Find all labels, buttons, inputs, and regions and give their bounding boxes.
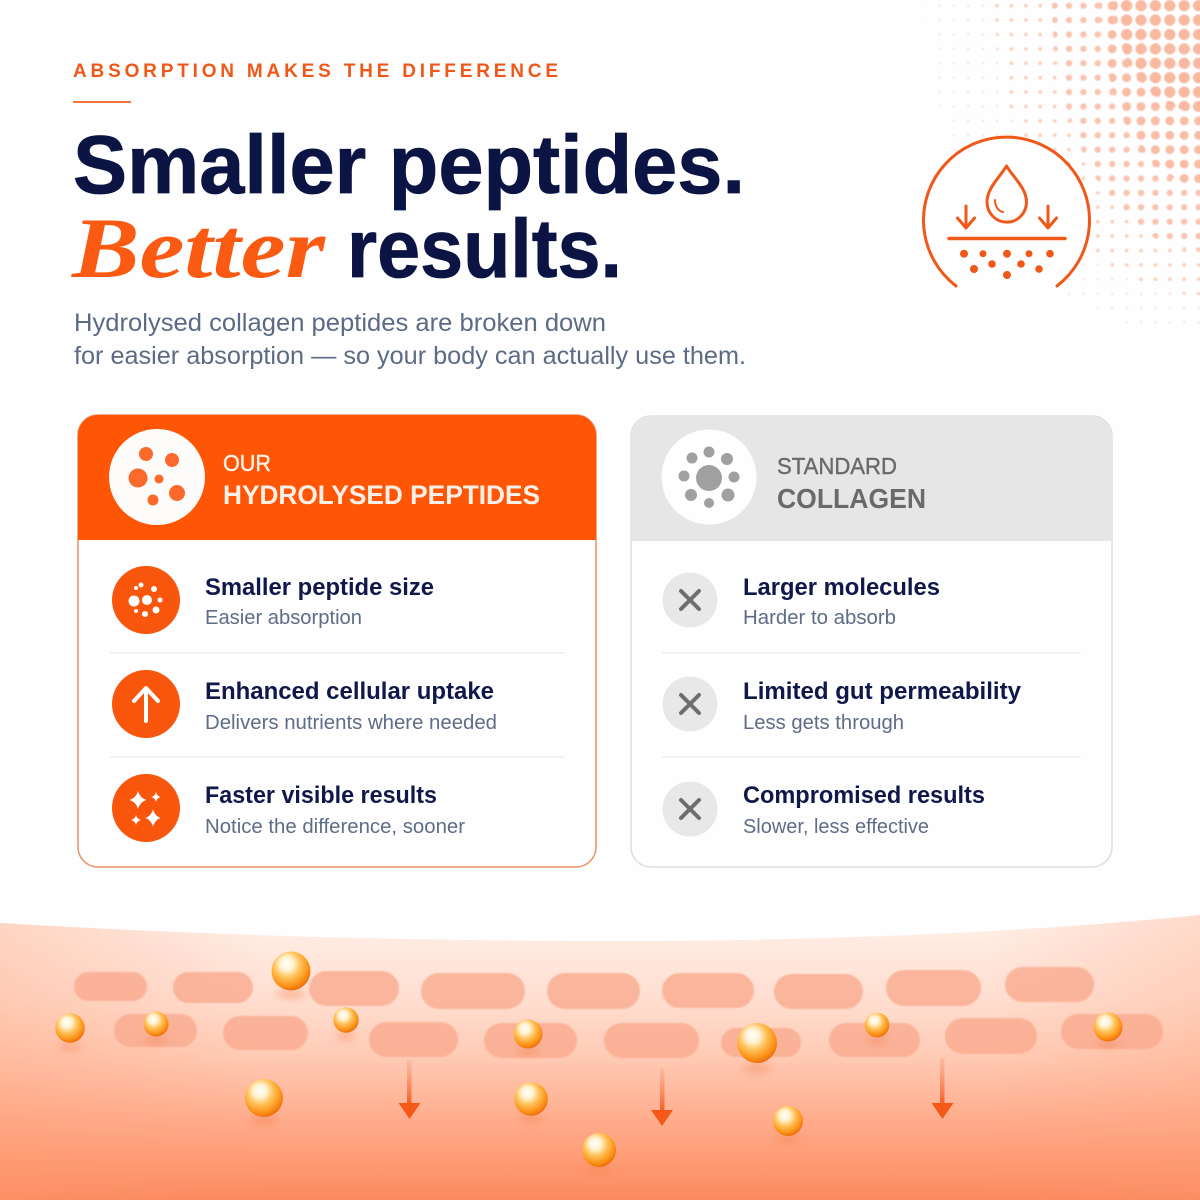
eyebrow heading: ABSORPTION MAKES THE DIFFERENCE <box>73 61 558 82</box>
sphere shadows <box>58 989 1119 1174</box>
row: larger molecules: Harder to absorb <box>743 607 896 629</box>
row: enhanced cellular uptake: Delivers nutrients where needed <box>205 712 497 734</box>
title line 1: Smaller peptides. <box>73 118 745 211</box>
row: compromised results <box>662 782 985 838</box>
arrow <box>651 1068 673 1126</box>
panel header: orange band <box>78 415 596 540</box>
row: faster visible results: Notice the difference, sooner <box>205 816 465 838</box>
skin cells <box>74 967 1163 1058</box>
icon: up arrow <box>112 670 180 738</box>
subtitle: Hydrolysed collagen peptides are broken down <box>74 309 606 337</box>
row: faster visible results: Faster visible results <box>205 782 437 809</box>
row: limited gut permeability: Limited gut permeability <box>743 678 1022 705</box>
header label: STANDARD <box>777 453 897 479</box>
icon: small peptides <box>109 429 205 525</box>
row: larger molecules: Larger molecules <box>743 574 940 601</box>
header label: HYDROLYSED PEPTIDES <box>223 480 540 510</box>
row: larger molecules <box>662 572 940 629</box>
header label <box>777 453 926 514</box>
arrow <box>932 1058 954 1119</box>
panel: our hydrolysed peptides <box>78 415 596 867</box>
row: limited gut permeability: Less gets through <box>743 712 904 734</box>
panel: standard collagen <box>631 416 1112 867</box>
arrow <box>398 1060 420 1119</box>
icon: cross <box>662 572 718 628</box>
row: smaller peptide size: Smaller peptide size <box>205 574 434 601</box>
icon: cross <box>662 782 718 836</box>
icon: sparkles <box>112 774 180 842</box>
row: compromised results: Slower, less effective <box>743 816 929 838</box>
peptide spheres <box>55 952 1123 1167</box>
icon: absorption through skin <box>923 137 1090 305</box>
skin illustration <box>0 915 1200 1200</box>
title <box>71 118 745 296</box>
icon: cross <box>662 676 718 732</box>
absorption arrows <box>398 1058 954 1126</box>
header label: OUR <box>223 450 271 476</box>
row: smaller peptide size: Easier absorption <box>205 607 362 629</box>
title line 2: results. <box>347 202 622 295</box>
row: enhanced cellular uptake <box>112 670 497 738</box>
row: smaller peptide size <box>112 566 434 634</box>
row: compromised results: Compromised results <box>743 782 985 809</box>
row: faster visible results <box>112 774 465 842</box>
row: enhanced cellular uptake: Enhanced cellular uptake <box>205 678 494 705</box>
icon: small dots <box>112 566 180 634</box>
panel header: grey band <box>632 417 1111 541</box>
header label: COLLAGEN <box>777 483 926 514</box>
icon: large molecule <box>662 430 756 524</box>
row: limited gut permeability <box>662 676 1022 734</box>
title accent word: Better <box>71 200 327 296</box>
header label <box>223 450 540 510</box>
subtitle: for easier absorption — so your body can actually use them. <box>74 342 746 370</box>
subtitle <box>74 309 746 370</box>
